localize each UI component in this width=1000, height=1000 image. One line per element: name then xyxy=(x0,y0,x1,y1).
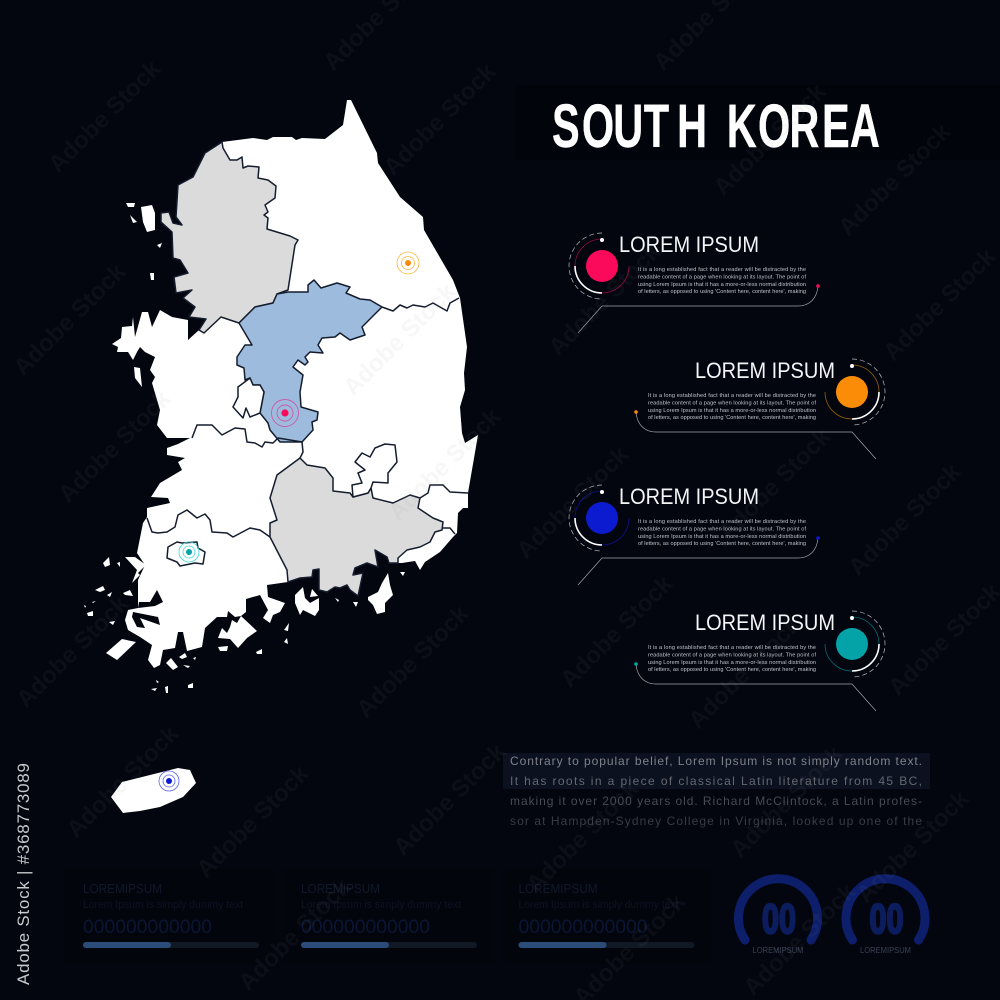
gauge 1: 00 xyxy=(762,895,796,942)
gauge 1 xyxy=(739,879,818,955)
watermark pattern: Adobe Stock xyxy=(338,278,462,401)
region: Gwangju xyxy=(167,542,205,566)
watermark pattern: Adobe Stock xyxy=(738,878,862,1000)
watermark pattern: Adobe Stock xyxy=(543,238,667,361)
watermark pattern: Adobe Stock xyxy=(555,570,679,693)
callout text: of letters, as opposed to using 'Content here, content here', making xyxy=(638,289,806,295)
callout: teal xyxy=(634,610,885,711)
paragraph: It has roots in a piece of classical Latin literature from 45 BC, xyxy=(510,774,922,788)
callout heading: LOREM IPSUM xyxy=(619,232,759,257)
watermark pattern: Adobe Stock xyxy=(708,78,832,201)
watermark pattern: Adobe Stock xyxy=(8,258,132,381)
watermark pattern: Adobe Stock xyxy=(851,785,975,908)
callout text xyxy=(648,645,816,673)
callout text xyxy=(638,267,806,295)
progress bar xyxy=(518,942,694,948)
watermark pattern: Adobe Stock xyxy=(725,740,849,863)
callout text: of letters, as opposed to using 'Content here, content here', making xyxy=(648,415,816,421)
gauge 2: LOREMIPSUM xyxy=(860,946,911,955)
paragraph: making it over 2000 years old. Richard McClintock, a Latin profes- xyxy=(510,794,922,808)
callout text: It is a long established fact that a reader will be distracted by the xyxy=(648,645,816,651)
side credit: Adobe Stock | #368773089 xyxy=(14,763,33,985)
callout text: readable content of a page when looking at its layout. The point of xyxy=(648,652,816,658)
region borders xyxy=(147,298,468,537)
mainland xyxy=(112,100,478,668)
callout text: It is a long established fact that a reader will be distracted by the xyxy=(638,519,806,525)
marker: teal xyxy=(179,542,199,562)
watermark pattern: Adobe Stock xyxy=(833,118,957,241)
stat block 3: Lorem Ipsum is simply dummy text xyxy=(518,899,678,911)
region: Chungbuk xyxy=(237,280,382,442)
stat block 2: 000000000000 xyxy=(301,917,430,938)
watermark pattern: Adobe Stock xyxy=(191,760,315,883)
stat block 3 xyxy=(500,868,710,964)
callout text: using Lorem Ipsum is that it has a more-or-less normal distribution xyxy=(648,660,816,666)
callout: orange xyxy=(634,358,885,459)
region: Gyeongnam xyxy=(270,458,443,596)
region: Jeju island xyxy=(111,768,196,813)
coastal inlets xyxy=(132,590,163,628)
gauge 2: 00 xyxy=(870,895,904,942)
stat block 2 xyxy=(283,868,493,964)
callout text: of letters, as opposed to using 'Content here, content here', making xyxy=(648,667,816,673)
watermark pattern: Adobe Stock xyxy=(683,611,807,734)
region: Daegu xyxy=(352,444,397,497)
islands xyxy=(84,203,405,693)
gauge 2 xyxy=(846,879,925,955)
watermark pattern: Adobe Stock xyxy=(378,58,502,181)
callout text: using Lorem Ipsum is that it has a more-or-less normal distribution xyxy=(638,534,806,540)
gauge 1: LOREMIPSUM xyxy=(752,946,804,955)
marker: blue xyxy=(159,771,179,791)
stat block 3: 000000000000 xyxy=(518,917,648,938)
stat block 1: LOREMIPSUM xyxy=(83,881,162,896)
marker: orange xyxy=(397,252,419,274)
region: Gyeonggi xyxy=(161,142,298,333)
watermark pattern: Adobe Stock xyxy=(351,600,475,723)
stat block 2: Lorem Ipsum is simply dummy text xyxy=(301,899,461,911)
watermark pattern: Adobe Stock xyxy=(383,403,507,526)
watermark pattern: Adobe Stock xyxy=(53,385,177,508)
callout text: It is a long established fact that a reader will be distracted by the xyxy=(648,393,816,399)
title: SOUTH KOREA xyxy=(552,93,880,161)
callout text: readable content of a page when looking at its layout. The point of xyxy=(648,400,816,406)
paragraph: sor at Hampden-Sydney College in Virginia, looked up one of the xyxy=(510,814,922,828)
watermark pattern: Adobe Stock xyxy=(233,873,357,996)
watermark pattern: Adobe Stock xyxy=(61,720,185,843)
callout heading: LOREM IPSUM xyxy=(695,610,835,635)
callout text xyxy=(638,519,806,547)
watermark pattern: Adobe Stock xyxy=(511,441,635,564)
region: Sejong xyxy=(233,378,264,418)
marker: pink xyxy=(272,400,298,426)
callout heading: LOREM IPSUM xyxy=(619,484,759,509)
callout heading: LOREM IPSUM xyxy=(695,358,835,383)
stat block 1: 000000000000 xyxy=(83,917,212,938)
watermark pattern: Adobe Stock xyxy=(713,423,837,546)
callout text xyxy=(648,393,816,421)
stat block 3: LOREMIPSUM xyxy=(518,881,598,896)
callout text: using Lorem Ipsum is that it has a more-or-less normal distribution xyxy=(638,282,806,288)
map of South Korea xyxy=(84,100,478,813)
watermark pattern: Adobe Stock xyxy=(11,590,135,713)
watermark pattern: Adobe Stock xyxy=(43,55,167,178)
callout: blue xyxy=(569,484,820,585)
callout text: using Lorem Ipsum is that it has a more-or-less normal distribution xyxy=(648,408,816,414)
stat block 1 xyxy=(65,868,275,964)
paragraph: Contrary to popular belief, Lorem Ipsum is not simply random text. xyxy=(510,754,922,768)
stat block 1: Lorem Ipsum is simply dummy text xyxy=(83,899,243,911)
watermark pattern: Adobe Stock xyxy=(878,243,1000,366)
paragraph xyxy=(503,753,930,828)
callout text: It is a long established fact that a reader will be distracted by the xyxy=(638,267,806,273)
watermark pattern: Adobe Stock xyxy=(388,738,512,861)
title panel xyxy=(515,85,1000,161)
progress bar xyxy=(301,942,477,948)
callout text: of letters, as opposed to using 'Content here, content here', making xyxy=(638,541,806,547)
watermark pattern: Adobe Stock xyxy=(843,458,967,581)
watermark pattern: Adobe Stock xyxy=(521,775,645,898)
callout: pink xyxy=(569,232,820,333)
callout text: readable content of a page when looking at its layout. The point of xyxy=(638,274,806,280)
stat block 2: LOREMIPSUM xyxy=(301,881,380,896)
progress bar xyxy=(83,942,259,948)
callout text: readable content of a page when looking at its layout. The point of xyxy=(638,526,806,532)
